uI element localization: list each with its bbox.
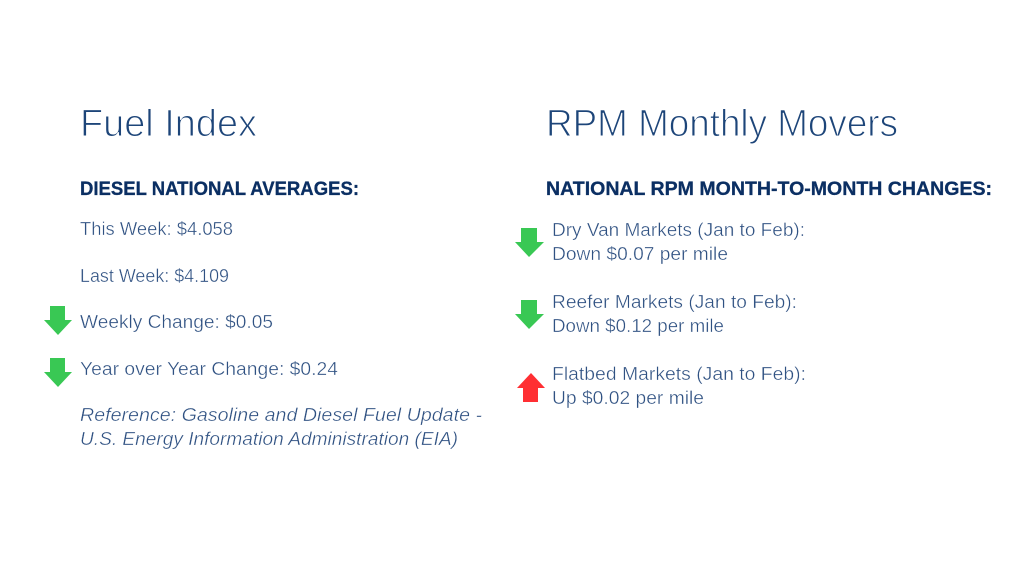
icon: red up arrow, flatbed <box>517 373 545 402</box>
icon: green down arrow, weekly change <box>44 306 72 335</box>
icon: green down arrow, dry van <box>515 228 544 257</box>
heading: Fuel Index: Fuel Index <box>80 103 257 145</box>
text: last week: Last Week: $4.109 <box>80 266 229 286</box>
text: reefer line 2: Down $0.12 per mile <box>552 316 724 336</box>
icon: green down arrow, reefer <box>515 300 544 329</box>
panel: rpm monthly movers <box>515 103 992 408</box>
heading: RPM Monthly Movers: RPM Monthly Movers <box>546 103 898 145</box>
text: reefer line 1: Reefer Markets (Jan to Feb): <box>552 292 797 312</box>
text: this week: This Week: $4.058 <box>80 219 233 239</box>
text: year over year change: Year over Year Change: $0.24 <box>80 359 338 379</box>
text: dry van line 1: Dry Van Markets (Jan to Feb): <box>552 220 805 240</box>
text: weekly change: Weekly Change: $0.05 <box>80 312 273 332</box>
text: flatbed line 2: Up $0.02 per mile <box>552 388 704 408</box>
text: dry van line 2: Down $0.07 per mile <box>552 244 728 264</box>
text: flatbed line 1: Flatbed Markets (Jan to Feb): <box>552 364 806 384</box>
subheading: national rpm changes: NATIONAL RPM MONTH-TO-MONTH CHANGES: <box>546 178 992 200</box>
icon: green down arrow, year over year change <box>44 358 72 387</box>
text: reference line 2: U.S. Energy Information Administration (EIA) <box>80 429 458 449</box>
text: reference line 1: Reference: Gasoline and Diesel Fuel Update - <box>80 405 482 425</box>
panel: fuel index <box>44 103 482 449</box>
subheading: diesel national averages: DIESEL NATIONAL AVERAGES: <box>80 178 359 200</box>
